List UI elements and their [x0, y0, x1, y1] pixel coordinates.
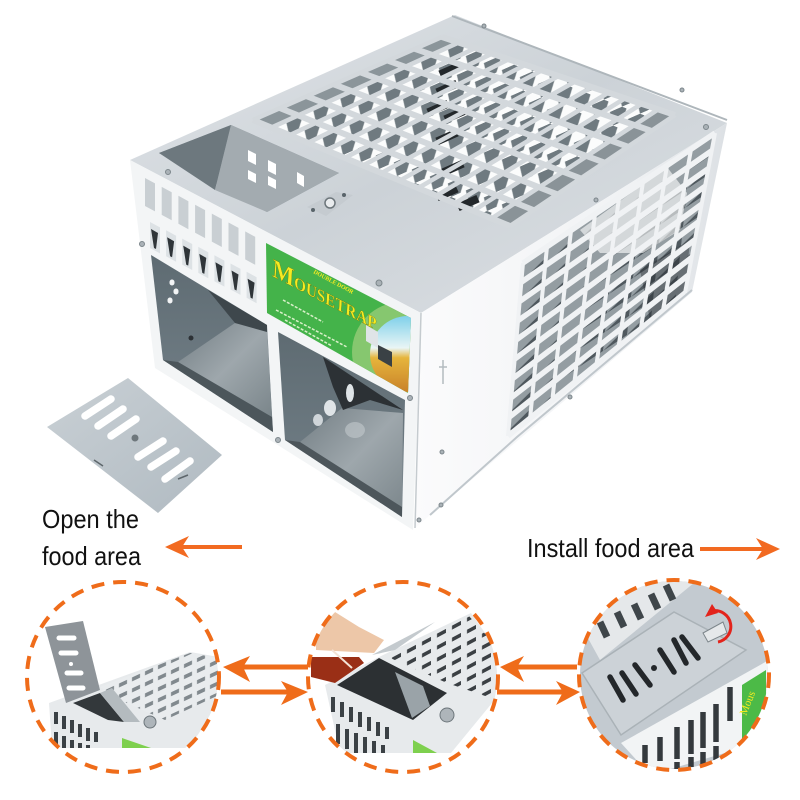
grid strip — [588, 582, 692, 660]
sticker fragment text: Mous — [738, 689, 758, 717]
arrow: install (right) — [700, 538, 780, 560]
dashed ring — [27, 582, 219, 772]
sticker — [413, 740, 437, 753]
interior — [73, 693, 124, 722]
cover plate — [582, 612, 746, 735]
right opening — [278, 332, 405, 517]
sleeve — [311, 657, 364, 683]
front upper vents — [145, 178, 257, 303]
cage body — [49, 652, 219, 748]
top ventilation grid — [253, 37, 675, 226]
label: install food area: Install food area — [527, 533, 694, 563]
sticker — [122, 738, 151, 748]
label: open the food area: Open the — [42, 504, 139, 534]
sticker title: MOUSETRAP — [272, 253, 378, 336]
top face — [130, 15, 727, 313]
label: open the food area — [42, 504, 141, 571]
red rotate arrow — [705, 604, 731, 642]
left opening — [151, 255, 273, 432]
label: open the food area: food area — [42, 541, 141, 571]
step 3 circle: cover installed, turn latch — [578, 578, 769, 775]
right side face — [415, 123, 727, 528]
arrows between step 2 and step 3 — [497, 656, 580, 705]
right side ventilation grid — [508, 133, 715, 436]
latch — [144, 716, 156, 728]
raised cover — [372, 622, 435, 655]
dashed ring — [579, 580, 769, 770]
latch — [703, 622, 727, 642]
metal top — [579, 580, 769, 770]
latch — [307, 192, 353, 216]
hand — [316, 612, 384, 653]
front vents — [333, 697, 387, 753]
sticker subtitle: DOUBLE DOOR — [312, 269, 355, 296]
latch — [440, 708, 454, 722]
step 1 circle: cover open — [27, 582, 219, 772]
cover slots — [610, 637, 698, 700]
interior — [337, 658, 447, 720]
mousetrap cage — [130, 15, 727, 530]
step 2 circle: hand lifting cover — [308, 582, 498, 772]
cage screws — [140, 24, 708, 522]
mini top grid — [100, 653, 219, 720]
front corner edge — [415, 313, 421, 528]
mini top grid — [388, 615, 497, 700]
front face — [621, 660, 769, 775]
raised cover — [45, 621, 100, 703]
detached food area cover plate — [47, 378, 222, 513]
front slots — [645, 687, 730, 770]
food compartment opening — [159, 125, 339, 212]
dashed ring — [308, 582, 498, 772]
front face — [130, 160, 421, 530]
arrows between step 1 and step 2 — [221, 656, 308, 705]
product sticker — [266, 243, 411, 393]
front vents — [56, 712, 96, 748]
clip on right face — [439, 360, 447, 384]
arrow: open (left) — [165, 536, 242, 558]
sticker — [742, 670, 766, 743]
back edge flange — [452, 16, 727, 120]
cage body — [325, 613, 497, 753]
lower flange of right face — [430, 290, 692, 515]
